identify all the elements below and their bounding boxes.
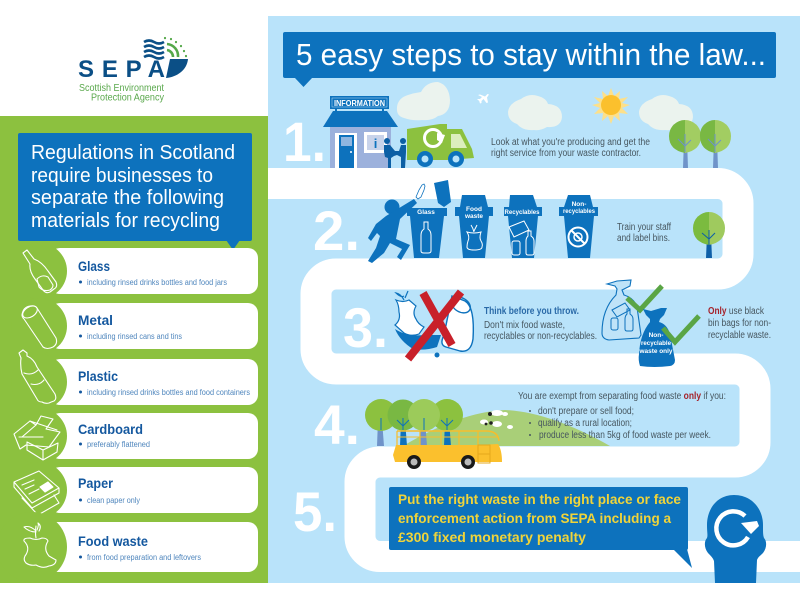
panel: green materials sidebar	[0, 116, 268, 583]
number 1: 1.	[283, 110, 326, 173]
step 4	[314, 391, 726, 469]
text: think before you throw: Don't mix food waste,	[484, 320, 565, 331]
callout: enforcement warning: £300 fixed monetary penalty	[398, 529, 586, 545]
icon: cardboard box	[14, 416, 60, 460]
bin: food waste	[455, 195, 493, 258]
callout: enforcement warning: Put the right waste in the right place or face	[398, 491, 681, 507]
step 1	[283, 96, 731, 173]
bin: food waste: waste	[464, 213, 483, 220]
icon: plastic bottle	[19, 350, 56, 403]
icon: two trees	[669, 120, 731, 168]
scenery: clouds, plane and sun	[397, 82, 693, 130]
card: metal	[11, 298, 258, 354]
text: step 2: Train your staff	[617, 222, 671, 233]
text: only use black bin bags	[708, 306, 771, 341]
card: metal: including rinsed cans and tins	[87, 332, 182, 341]
icon: hill	[403, 410, 610, 446]
icon: can	[21, 304, 57, 348]
callout: regulations	[18, 133, 252, 250]
step 3	[343, 280, 771, 367]
icon: green tick	[627, 286, 662, 310]
card: paper: clean paper only	[87, 496, 140, 505]
card: metal: Metal	[78, 312, 113, 328]
card: food waste: Food waste	[78, 533, 148, 549]
icon: red cross	[408, 292, 461, 359]
winding white road	[268, 184, 800, 556]
card: glass	[11, 243, 258, 299]
icon: newspaper	[14, 471, 59, 515]
card: plastic	[11, 350, 258, 410]
callout: enforcement warning: enforcement action from SEPA including a	[398, 510, 671, 526]
icon: black bin bag	[639, 308, 675, 367]
icon: apple core	[24, 523, 56, 567]
bin: recyclables	[504, 195, 542, 258]
icon: mixed waste crossed out	[395, 291, 473, 359]
logo wordmark: SEPA	[78, 56, 165, 83]
text: step 1: right service from your waste contractor.	[491, 148, 641, 159]
icon: information office: INFORMATION	[334, 99, 385, 108]
logo strapline: Scottish Environment	[79, 82, 164, 94]
heading: 5 easy steps	[283, 32, 776, 87]
icon: plane	[477, 94, 489, 104]
text: exemptions: don't prepare or sell food;	[538, 406, 634, 417]
number 2: 2.	[313, 199, 360, 262]
card: plastic: including rinsed drinks bottles and food containers	[87, 388, 250, 397]
icon: green tick	[663, 316, 699, 342]
text: step 1	[491, 137, 650, 159]
card: glass: including rinsed drinks bottles and food jars	[87, 278, 227, 287]
callout: regulations: require businesses to	[31, 165, 213, 187]
card: cardboard	[11, 408, 258, 464]
text: think before you throw: Think before you throw.	[484, 306, 579, 317]
icon: head with recycling symbol	[705, 495, 766, 583]
icon: glass bottle	[23, 250, 57, 293]
icon: tree	[693, 212, 725, 258]
panel: steps background	[268, 16, 800, 583]
text: think before you throw	[484, 306, 597, 342]
text: exemptions: produce less than 5kg of food waste per week.	[539, 430, 711, 441]
icon: black bin bag: waste only	[639, 348, 673, 355]
card: cardboard: preferably flattened	[87, 440, 150, 449]
step 5	[293, 480, 766, 583]
panel: logo	[78, 38, 188, 104]
text: exemptions: You are exempt from separating food waste only if you:	[518, 391, 726, 402]
callout: regulations: separate the following	[31, 187, 224, 209]
icon: two people shaking hands	[384, 138, 406, 168]
text: only use black bin bags: Only use black	[708, 306, 765, 317]
card: food waste: from food preparation and leftovers	[87, 553, 201, 562]
icon: clear recycling bag	[602, 280, 641, 340]
text: think before you throw: recyclables or non-recyclables.	[484, 331, 597, 342]
heading: 5 easy steps: 5 easy steps to stay within the law...	[296, 37, 766, 72]
bin: non-recyclables	[559, 195, 598, 258]
card: paper: Paper	[78, 475, 113, 491]
icon: row of trees	[365, 399, 463, 446]
text: step 1: Look at what you're producing and get the	[491, 137, 650, 148]
icon: black bin bag: recyclable	[641, 340, 671, 347]
bin: glass	[407, 208, 447, 258]
number 5: 5.	[293, 480, 337, 543]
callout: enforcement warning	[389, 487, 692, 568]
bin: recyclables: Recyclables	[504, 209, 540, 216]
number 4: 4.	[314, 393, 360, 456]
text: exemptions: qualify as a rural location;	[538, 418, 632, 429]
icon: recycling truck	[407, 124, 474, 167]
icon: information office	[323, 96, 398, 168]
bin: food waste: Food	[466, 206, 482, 213]
number 3: 3.	[343, 296, 388, 359]
card: glass: Glass	[78, 258, 110, 274]
logo strapline	[79, 82, 165, 104]
bin: glass: Glass	[417, 209, 435, 216]
card: plastic: Plastic	[78, 368, 118, 384]
text: step 2: and label bins.	[617, 233, 670, 244]
icon: sun	[592, 88, 630, 124]
card: paper	[11, 462, 258, 518]
icon: information office: i	[374, 136, 377, 151]
icon: yellow bus	[393, 431, 502, 469]
bin: non-recyclables: Non-	[572, 201, 586, 208]
text: only use black bin bags: recyclable waste.	[708, 330, 771, 341]
card: cardboard: Cardboard	[78, 421, 143, 437]
text: exemptions	[518, 391, 726, 441]
text: only use black bin bags: bin bags for non-	[708, 318, 771, 329]
icon: person throwing bottle in bin	[368, 180, 451, 263]
bin: non-recyclables: recyclables	[563, 208, 595, 215]
icon: sepa waves and sun	[144, 38, 188, 78]
logo strapline: Protection Agency	[91, 92, 165, 104]
card: food waste	[0, 512, 258, 582]
text: step 2	[617, 222, 671, 244]
callout: regulations: Regulations in Scotland	[31, 142, 235, 164]
step 2	[313, 180, 725, 263]
icon: sheep	[480, 410, 513, 429]
callout: regulations: materials for recycling	[31, 210, 220, 232]
icon: clouds	[397, 82, 693, 130]
icon: black bin bag: Non-	[649, 332, 663, 339]
